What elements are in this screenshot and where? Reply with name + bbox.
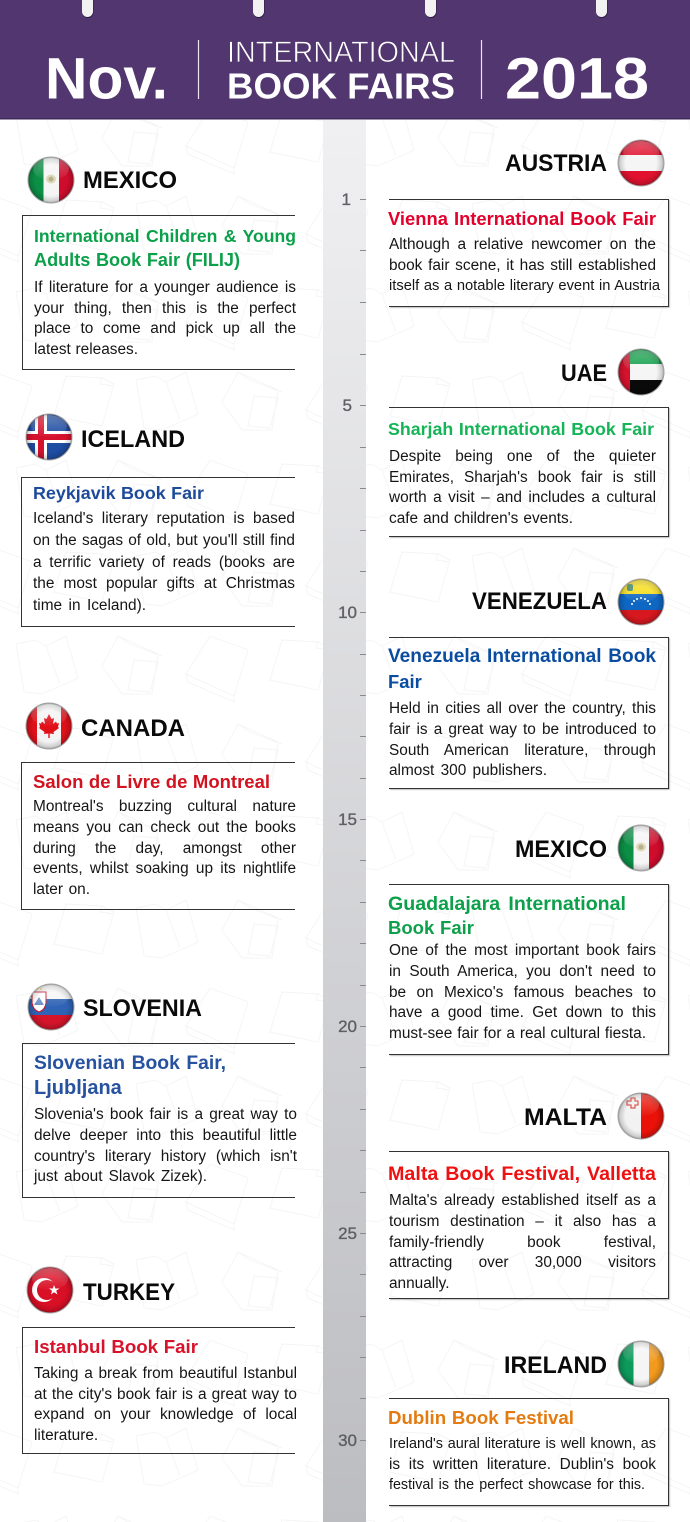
panel: Ireland: [388, 1340, 670, 1508]
description: [34, 1365, 297, 1444]
title: [227, 36, 455, 106]
country heading: UAE: [561, 348, 664, 396]
description: One of the most important book fairs: [389, 942, 656, 959]
country heading: Canada: [26, 702, 185, 750]
country heading: Mexico: MEXICO: [515, 836, 607, 863]
description: festival is the perfect showcase for this.: [389, 1477, 645, 1493]
fair name: International Children & Young: [34, 226, 296, 246]
fair name: Ljubljana: [34, 1077, 122, 1099]
country heading: Mexico: [515, 824, 664, 872]
card: Venezuela International Book Fair: [388, 637, 670, 790]
description: Taking a break from beautiful Istanbul: [34, 1365, 297, 1382]
fair name: Guadalajara International: [388, 893, 626, 915]
card: Sharjah International Book Fair: [388, 407, 670, 538]
panel: Malta: [388, 1092, 670, 1300]
description: latest releases.: [34, 341, 138, 358]
fair name: Fair: [388, 671, 422, 692]
fair name: Adults Book Fair (FILIJ): [34, 250, 240, 270]
description: almost 300 publishers.: [389, 762, 547, 779]
description: [389, 700, 656, 779]
card: Vienna International Book Fair: [388, 199, 670, 308]
description: Slovenia's book fair is a great way to: [34, 1106, 297, 1123]
description: means you can check out the books: [33, 819, 296, 836]
title: INTERNATIONAL: [227, 36, 455, 69]
description: country's literary history (which isn't: [34, 1148, 297, 1165]
description: have a good time. Get down to this: [389, 1004, 656, 1021]
card: Salon de Livre de Montreal: [21, 762, 296, 910]
description: is its written literature. Dublin's book: [389, 1456, 656, 1473]
description: cafe and children's events.: [389, 510, 573, 527]
date ruler: ticks and day numbers: 10: [338, 603, 357, 622]
description: Although a relative newcomer on the: [389, 236, 656, 253]
card: Slovenian Book Fair: [22, 1043, 297, 1198]
panel: Iceland: [21, 414, 295, 627]
icon: calendar binder rings: [82, 0, 608, 18]
country heading: Turkey: [26, 1266, 175, 1314]
description: in South America, you don't need to: [389, 963, 656, 980]
description: itself as a notable literary event in Austria: [389, 278, 660, 294]
description: [389, 236, 660, 294]
fair name: Salon de Livre de Montreal: [33, 771, 270, 792]
icon: Venezuela flag: [618, 579, 664, 626]
card: Malta Book Festival, Valletta: [388, 1151, 670, 1300]
date ruler: ticks and day numbers: 5: [343, 396, 352, 415]
description: book fair scene, it has still established: [389, 257, 656, 274]
description: fair is a great way to be introduced to: [389, 721, 656, 738]
description: [389, 942, 656, 1042]
country heading: Iceland: [26, 414, 185, 460]
description: the most popular gifts at Christmas: [33, 575, 295, 592]
card: Dublin Book Festival: [388, 1398, 670, 1508]
fair name: Slovenian Book Fair,: [34, 1053, 226, 1074]
country heading: Malta: MALTA: [524, 1104, 607, 1131]
date ruler: ticks and day numbers: 25: [338, 1224, 357, 1243]
description: [33, 798, 296, 898]
icon: Malta flag: [618, 1093, 664, 1139]
description: [389, 1192, 656, 1292]
description: tourism destination – it also has a: [389, 1213, 656, 1230]
year: 2018: [505, 46, 649, 112]
country heading: Venezuela: VENEZUELA: [472, 588, 607, 615]
card: Guadalajara International Book Fair: [388, 884, 670, 1056]
panel: Mexico (FILIJ): [22, 156, 296, 370]
country heading: Slovenia: [28, 984, 202, 1030]
card: Istanbul Book Fair: [22, 1327, 297, 1454]
description: Emirates, Sharjah's book fair is still: [389, 469, 656, 486]
header banner: [0, 0, 690, 120]
description: a terrific variety of reads (books are: [33, 554, 295, 571]
description: later on.: [33, 881, 90, 898]
description: Ireland's aural literature is well known, as: [389, 1436, 656, 1452]
description: time in Iceland).: [33, 597, 146, 614]
description: your thing, then this is the perfect: [34, 300, 296, 317]
panel: Venezuela: [388, 578, 670, 790]
description: worth a visit – and includes a cultural: [389, 489, 656, 506]
description: delve deeper into this beautiful little: [34, 1127, 297, 1144]
fair name: [34, 1053, 226, 1099]
panel: Mexico (Guadalajara): [388, 824, 670, 1056]
fair name: [34, 226, 296, 270]
country heading: Ireland: [504, 1340, 664, 1388]
panel: Austria: [388, 140, 670, 308]
fair name: Book Fair: [388, 917, 474, 938]
icon: Mexico flag: [28, 157, 74, 203]
date ruler: ticks and day numbers: [338, 190, 366, 1450]
icon: Ireland flag: [618, 1341, 664, 1387]
country heading: Mexico: MEXICO: [83, 167, 177, 194]
description: Held in cities all over the country, this: [389, 700, 656, 717]
description: If literature for a younger audience is: [34, 279, 296, 296]
description: Malta's already established itself as a: [389, 1192, 656, 1209]
date ruler: ticks and day numbers: 30: [338, 1431, 357, 1450]
description: must-see fair for a real cultural fiesta.: [389, 1025, 646, 1042]
fair name: Vienna International Book Fair: [388, 208, 656, 229]
icon: Turkey flag: [27, 1267, 73, 1313]
country heading: Turkey: TURKEY: [83, 1279, 175, 1306]
icon: Slovenia flag: [28, 984, 74, 1031]
description: Despite being one of the quieter: [389, 448, 656, 465]
description: events, whilst soaking up its nightlife: [33, 860, 296, 877]
date ruler: ticks and day numbers: 20: [338, 1017, 357, 1036]
panel: UAE: [388, 348, 670, 538]
fair name: Dublin Book Festival: [388, 1407, 574, 1428]
fair name: [388, 893, 626, 938]
fair name: Malta Book Festival, Valletta: [388, 1163, 656, 1185]
country heading: Malta: [524, 1092, 664, 1140]
date ruler: ticks and day numbers: 1: [342, 190, 351, 209]
month: Nov.: [45, 46, 168, 112]
description: [389, 448, 656, 527]
country heading: Iceland: ICELAND: [81, 426, 185, 453]
fair name: [388, 646, 656, 692]
card: Reykjavik Book Fair: [21, 477, 295, 627]
fair name: Reykjavik Book Fair: [33, 483, 204, 503]
description: [34, 279, 296, 358]
icon: UAE flag: [618, 349, 664, 396]
country heading: Ireland: IRELAND: [504, 1352, 607, 1379]
country heading: Austria: AUSTRIA: [505, 150, 607, 177]
date ruler: ticks and day numbers: 15: [338, 810, 357, 829]
description: attracting over 30,000 visitors: [389, 1254, 656, 1271]
icon: Canada flag: [26, 703, 72, 749]
description: [389, 1436, 656, 1493]
description: family-friendly book festival,: [389, 1234, 656, 1251]
description: [33, 510, 295, 614]
description: at the city's book fair is a great way to: [34, 1386, 297, 1403]
fair name: Venezuela International Book: [388, 646, 656, 667]
description: Montreal's buzzing cultural nature: [33, 798, 296, 815]
icon: Iceland flag: [26, 414, 72, 460]
card: International Children & Young Adults Book Fair: [22, 215, 296, 370]
country heading: Slovenia: SLOVENIA: [83, 995, 202, 1022]
description: during the day, amongst other: [33, 840, 296, 857]
description: just about Slavok Zizek).: [34, 1168, 207, 1185]
country heading: Austria: [505, 140, 664, 186]
country heading: UAE: UAE: [561, 360, 607, 387]
description: [34, 1106, 297, 1185]
fair name: Istanbul Book Fair: [34, 1336, 198, 1357]
description: expand on your knowledge of local: [34, 1406, 297, 1423]
fair name: Sharjah International Book Fair: [388, 419, 654, 439]
panel: Turkey: [22, 1266, 297, 1454]
description: annually.: [389, 1275, 449, 1292]
country heading: Mexico: [28, 156, 177, 204]
description: South American literature, through: [389, 742, 656, 759]
description: on the sagas of old, but you'll still find: [33, 532, 295, 549]
panel: Canada: [21, 702, 296, 910]
icon: Austria flag: [618, 140, 664, 186]
country heading: Venezuela: [472, 578, 664, 626]
description: place to come and pick up all the: [34, 320, 296, 337]
country heading: Canada: CANADA: [81, 715, 185, 742]
description: literature.: [34, 1427, 98, 1444]
icon: Mexico flag: [618, 825, 664, 871]
panel: Slovenia: [22, 984, 297, 1198]
title: BOOK FAIRS: [227, 66, 455, 106]
description: Iceland's literary reputation is based: [33, 510, 295, 527]
description: be on Mexico's famous beaches to: [389, 984, 656, 1001]
